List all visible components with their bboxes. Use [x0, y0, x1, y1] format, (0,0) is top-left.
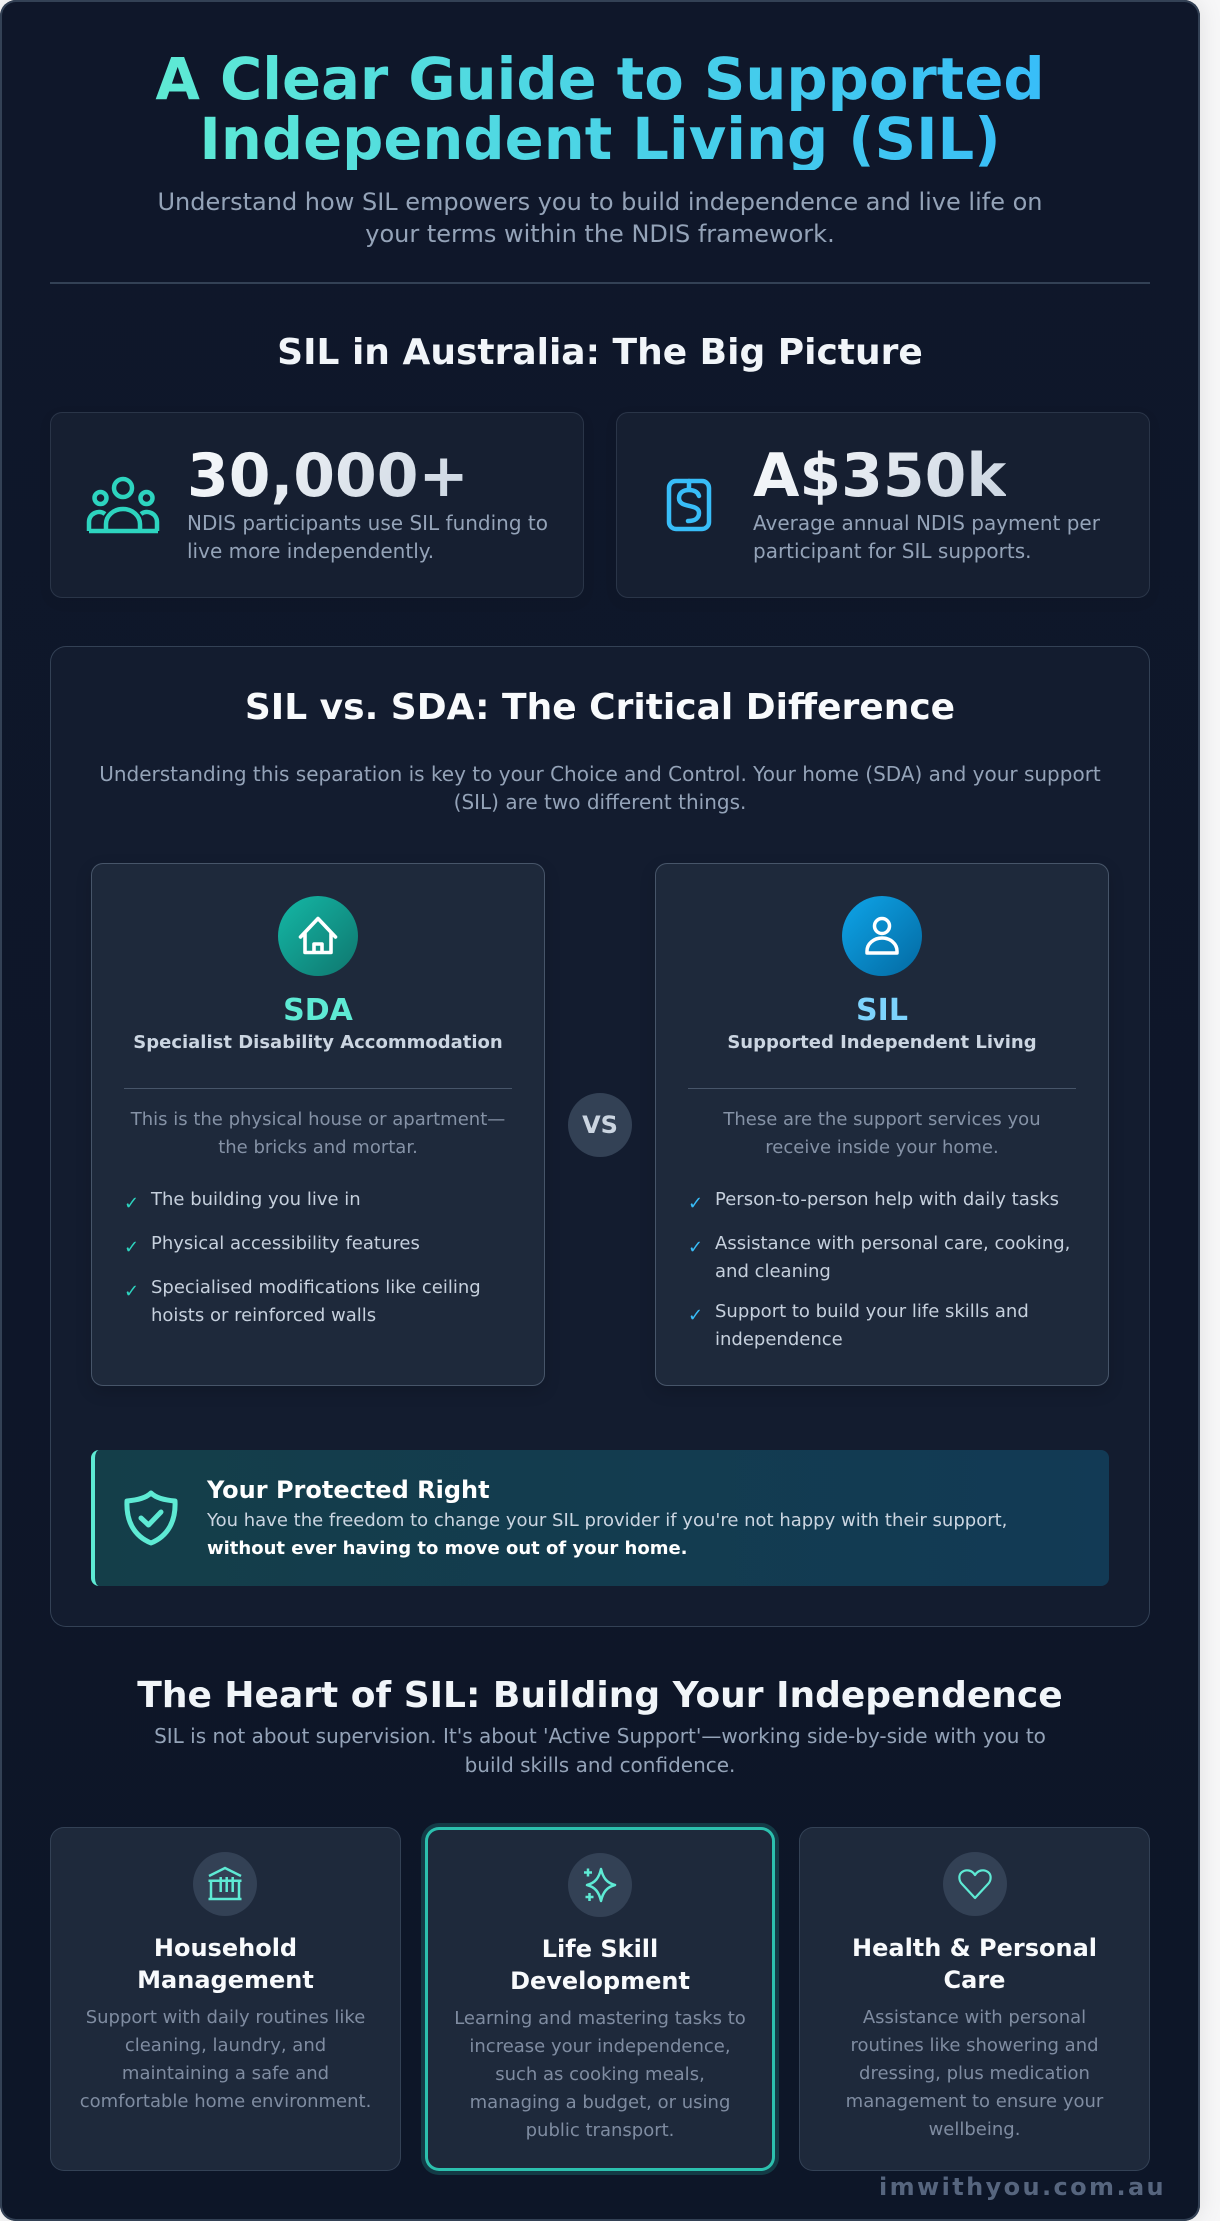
SDA list: The building you live in	[151, 1189, 361, 1210]
SDA description	[130, 1109, 505, 1158]
SDA description: This is the physical house or apartment—	[131, 1109, 505, 1130]
heading: heart of SIL: The Heart of SIL: Building Your Independence	[137, 1675, 1063, 1716]
SDA list: ✓	[124, 1193, 139, 1214]
SDA list	[124, 1189, 481, 1326]
icon: person	[842, 896, 922, 976]
SIL list: ✓	[688, 1237, 703, 1258]
card text: increase your independence,	[469, 2036, 731, 2057]
card: SIL	[655, 863, 1109, 1386]
callout text	[207, 1510, 1007, 1559]
icon: dollar	[666, 478, 712, 532]
card text: routines like showering and	[850, 2035, 1099, 2056]
stat card: payment	[616, 412, 1150, 598]
SIL subtitle: Supported Independent Living	[727, 1032, 1037, 1053]
subtitle: Understand how SIL empowers you to build independence and live life on	[157, 188, 1043, 216]
icon: house	[278, 896, 358, 976]
card title	[137, 1934, 314, 1994]
SIL list: Assistance with personal care, cooking,	[715, 1233, 1070, 1254]
SIL description: These are the support services you	[723, 1109, 1041, 1130]
title	[155, 46, 1045, 173]
icon: sparkle	[568, 1853, 632, 1917]
section intro: build skills and confidence.	[465, 1753, 735, 1777]
SDA subtitle: Specialist Disability Accommodation	[133, 1032, 503, 1053]
stat description: participant for SIL supports.	[753, 539, 1031, 563]
card text: maintaining a safe and	[122, 2063, 329, 2084]
card text: public transport.	[526, 2120, 674, 2141]
card title: Life Skill	[542, 1935, 658, 1963]
icon: shield	[124, 1490, 178, 1546]
SIL title: SIL	[856, 993, 908, 1028]
section intro	[154, 1724, 1046, 1777]
card title: Care	[944, 1966, 1005, 1994]
card text: wellbeing.	[929, 2119, 1020, 2140]
SDA list: hoists or reinforced walls	[151, 1305, 376, 1326]
card: SDA	[91, 863, 545, 1386]
SDA list: Physical accessibility features	[151, 1233, 420, 1254]
panel: SIL vs SDA	[50, 646, 1150, 1627]
SIL list	[688, 1189, 1070, 1350]
card text: Learning and mastering tasks to	[454, 2008, 746, 2029]
stat card: participants	[50, 412, 584, 598]
SDA list: Specialised modifications like ceiling	[151, 1277, 481, 1298]
icon: people group	[86, 476, 160, 534]
section intro: SIL is not about supervision. It's about 'Active Support'—working side-by-side with you to	[154, 1724, 1046, 1748]
subtitle	[157, 188, 1043, 248]
SIL description	[723, 1109, 1041, 1158]
stat description: live more independently.	[187, 539, 434, 563]
card: household management	[50, 1827, 401, 2171]
subtitle: your terms within the NDIS framework.	[365, 220, 835, 248]
stat value: 30,000+	[187, 441, 469, 511]
card text	[454, 2008, 746, 2141]
card title	[852, 1934, 1097, 1994]
card text	[80, 2007, 371, 2112]
callout text: You have the freedom to change your SIL provider if you're not happy with their support,	[207, 1510, 1007, 1531]
card title: Household	[154, 1934, 297, 1962]
panel intro: (SIL) are two different things.	[454, 790, 746, 814]
card title: Development	[510, 1967, 690, 1995]
SIL list: Support to build your life skills and	[715, 1300, 1029, 1322]
vs badge	[568, 1093, 632, 1157]
SDA title: SDA	[283, 993, 353, 1028]
stat value: A$350k	[753, 441, 1006, 511]
card text	[846, 2007, 1104, 2140]
card text: Support with daily routines like	[86, 2007, 365, 2028]
title: A Clear Guide to Supported	[155, 46, 1045, 113]
card text: such as cooking meals,	[495, 2064, 705, 2085]
callout: protected right	[91, 1450, 1109, 1586]
card text: Assistance with personal	[863, 2007, 1086, 2028]
callout text: without ever having to move out of your home.	[207, 1538, 688, 1559]
stat description	[187, 511, 548, 563]
card title: Management	[137, 1966, 314, 1994]
SIL list: independence	[715, 1328, 843, 1350]
callout heading: Your Protected Right	[207, 1476, 490, 1504]
stat description	[753, 511, 1100, 563]
card text: dressing, plus medication	[859, 2063, 1090, 2084]
card text: managing a budget, or using	[470, 2092, 730, 2113]
panel intro: Understanding this separation is key to your Choice and Control. Your home (SDA) and your support	[99, 762, 1101, 786]
heading: big picture: SIL in Australia: The Big Picture	[277, 332, 923, 373]
SIL list: and cleaning	[715, 1261, 831, 1282]
SIL list: ✓	[688, 1305, 703, 1326]
card title: Health & Personal	[852, 1934, 1097, 1962]
card text: comfortable home environment.	[80, 2091, 371, 2112]
SIL list: ✓	[688, 1193, 703, 1214]
title: Independent Living (SIL)	[199, 106, 1001, 173]
stat description: Average annual NDIS payment per	[753, 511, 1100, 535]
SDA list: ✓	[124, 1281, 139, 1302]
watermark: imwithyou.com.au	[879, 2172, 1166, 2200]
card: life skill development	[425, 1827, 775, 2171]
card: health and personal care	[799, 1827, 1150, 2171]
icon: heart	[942, 1852, 1006, 1916]
SIL description: receive inside your home.	[765, 1137, 999, 1158]
SDA description: the bricks and mortar.	[218, 1137, 418, 1158]
icon: household	[193, 1852, 257, 1916]
stat description: NDIS participants use SIL funding to	[187, 511, 548, 535]
card title	[510, 1935, 690, 1995]
SDA list: ✓	[124, 1237, 139, 1258]
heading: critical difference: SIL vs. SDA: The Critical Difference	[245, 687, 955, 728]
card text: management to ensure your	[846, 2091, 1103, 2112]
panel intro	[99, 762, 1101, 814]
SIL list: Person-to-person help with daily tasks	[715, 1189, 1059, 1210]
vs badge: VS	[582, 1111, 618, 1139]
card text: cleaning, laundry, and	[125, 2035, 326, 2056]
